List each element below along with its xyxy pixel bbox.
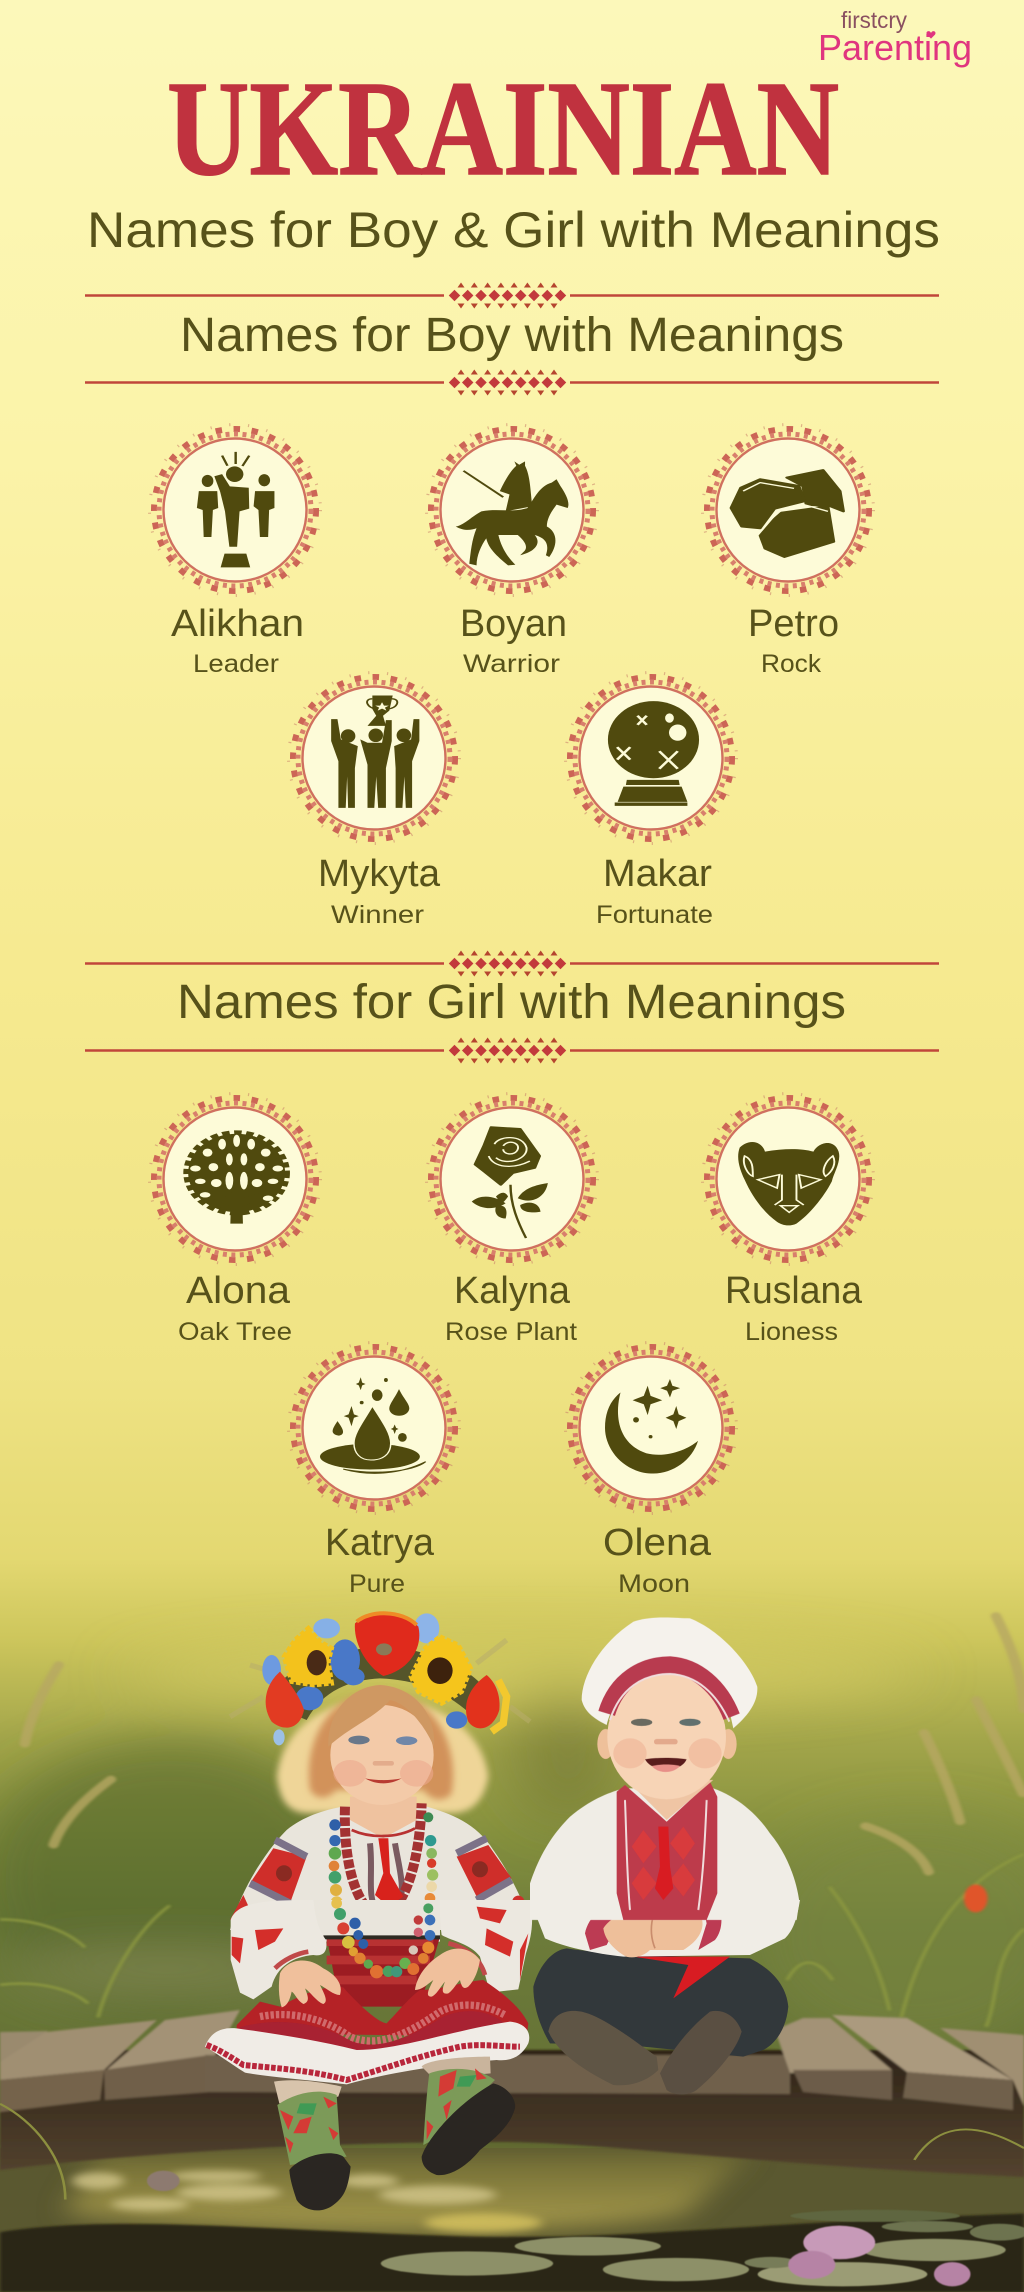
divider	[85, 1038, 939, 1064]
icon: crystal ball	[608, 701, 699, 806]
icon: rocks	[731, 470, 843, 557]
necklace beads	[331, 1898, 435, 1978]
labels: boy: Boyan	[460, 603, 567, 645]
icon: moon and stars	[605, 1379, 698, 1474]
labels: girl	[178, 1270, 863, 1598]
icons: boy	[197, 452, 843, 808]
skirt	[237, 1980, 528, 2037]
divider	[85, 282, 939, 308]
photo: children on a bridge	[0, 1613, 1024, 2292]
divider	[85, 370, 939, 396]
medallions: boy	[150, 424, 874, 844]
title: UKRAINIAN: UKRAINIAN	[167, 54, 839, 204]
boy: lower body	[530, 1900, 800, 2094]
bridge	[0, 2010, 1024, 2177]
foreground grass over bridge	[0, 2104, 1024, 2200]
logo: firstcry parenting: Parenting	[818, 27, 972, 68]
meadow background	[0, 1616, 1024, 2055]
labels: girl: Pure	[349, 1570, 405, 1598]
labels: boy: Makar	[603, 853, 712, 895]
icons: girl	[188, 1127, 839, 1474]
boy: head and shirt	[530, 1617, 799, 1920]
labels: girl: Moon	[618, 1570, 690, 1598]
labels: girl: Ruslana	[725, 1270, 863, 1312]
icon: rose plant	[472, 1127, 548, 1238]
medallions: girl	[150, 1094, 874, 1514]
labels: boy: Rock	[761, 650, 822, 678]
hands	[279, 1960, 341, 2007]
heading: girl names: Names for Girl with Meanings	[177, 976, 846, 1029]
divider	[85, 950, 939, 976]
icon: water drop	[320, 1377, 426, 1473]
labels: boy: Fortunate	[596, 901, 713, 929]
girl: skirt, hands and boots	[205, 1898, 532, 2210]
labels: boy: Mykyta	[318, 853, 441, 895]
labels: boy: Alikhan	[171, 603, 304, 645]
icon: winners with trophy	[331, 695, 419, 808]
icon: warrior on horse	[456, 461, 568, 565]
labels: girl: Alona	[186, 1270, 291, 1312]
heading: boy names: Names for Boy with Meanings	[180, 309, 844, 362]
panel: girl names	[150, 1094, 874, 1598]
labels: girl: Kalyna	[454, 1270, 571, 1312]
girl: upper body and head	[230, 1613, 532, 1931]
labels: boy: Winner	[331, 901, 424, 929]
pond water	[0, 2148, 1024, 2292]
grass and wheat	[0, 1616, 1024, 2027]
labels: boy: Leader	[193, 650, 279, 678]
boots	[274, 2080, 342, 2103]
lily pads and lotus flowers	[147, 2171, 1024, 2286]
labels: girl: Oak Tree	[178, 1318, 292, 1346]
labels: boy	[171, 603, 839, 929]
panel: boy names	[150, 424, 874, 929]
subtitle: Names for Boy & Girl with Meanings	[87, 202, 940, 258]
blouse embroidery and beads	[250, 1848, 307, 1903]
labels: boy: Warrior	[463, 650, 560, 678]
labels: girl: Katrya	[325, 1522, 435, 1564]
icon: lioness	[738, 1142, 839, 1225]
logo: firstcry parenting	[818, 7, 972, 68]
logo: firstcry parenting: firstcry	[841, 7, 907, 33]
labels: girl: Olena	[603, 1522, 712, 1564]
labels: boy: Petro	[748, 603, 839, 645]
labels: girl: Rose Plant	[445, 1318, 577, 1346]
icon: leader	[197, 452, 274, 567]
flower wreath	[230, 1613, 530, 1745]
icon: oak tree	[188, 1134, 285, 1224]
labels: girl: Lioness	[745, 1318, 838, 1346]
